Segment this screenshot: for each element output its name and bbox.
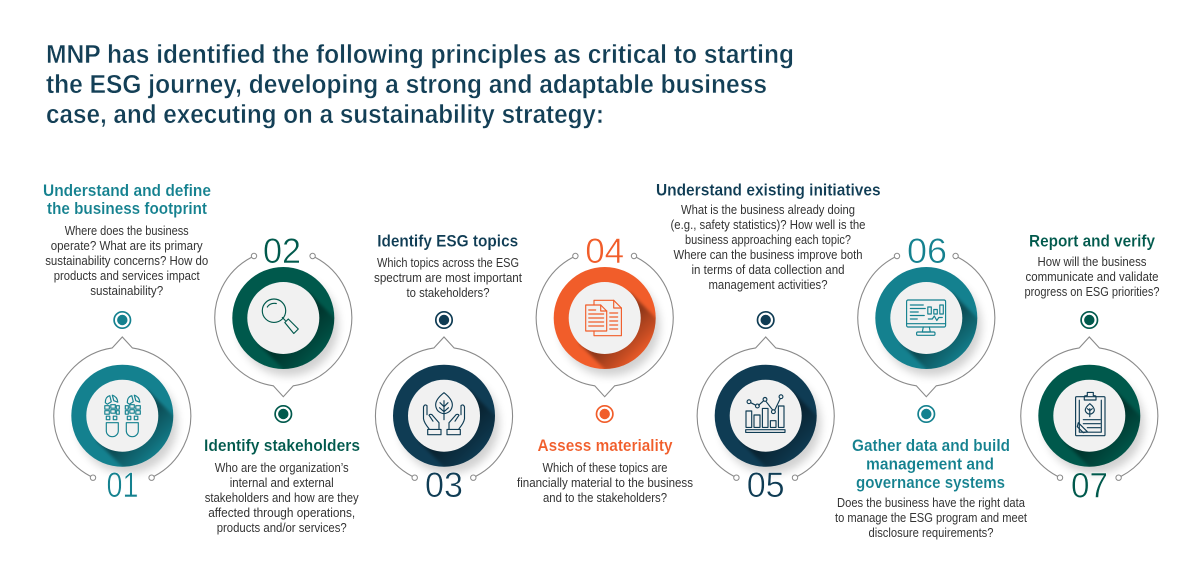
heading 04: Assess materiality	[538, 437, 673, 455]
body text 02: Who are the organization’s	[215, 461, 349, 475]
badge 02	[214, 252, 352, 398]
marker dot 02	[275, 406, 292, 422]
body text 05: management activities?	[708, 278, 828, 292]
title	[46, 41, 794, 129]
badge 04	[536, 252, 674, 398]
body text 03	[374, 256, 522, 300]
title: the ESG journey, developing a strong and adaptable business	[46, 71, 767, 99]
body text 03: spectrum are most important	[374, 271, 522, 285]
body text 01: operate? What are its primary	[51, 239, 203, 253]
heading 06: management and	[866, 456, 994, 474]
body text 05: in terms of data collection and	[692, 263, 844, 277]
badge 01	[53, 336, 192, 481]
step 02: identify stakeholders	[204, 231, 369, 535]
title: case, and executing on a sustainability strategy:	[46, 101, 604, 129]
number 06: 06	[907, 231, 947, 271]
marker dot 05	[758, 312, 774, 328]
badge 05	[696, 336, 835, 481]
icon: bar and line chart	[746, 395, 785, 432]
badge 03	[374, 336, 514, 481]
number 04: 04	[585, 231, 624, 271]
heading 02: Identify stakeholders	[204, 437, 360, 455]
marker dot 04	[596, 406, 613, 422]
step 05: understand existing initiatives	[656, 182, 881, 505]
body text 05: (e.g., safety statistics)? How well is the	[670, 218, 866, 232]
number 03: 03	[425, 465, 463, 505]
number 07: 07	[1071, 466, 1108, 506]
body text 04: and to the stakeholders?	[543, 491, 667, 505]
body text 07	[1024, 255, 1160, 299]
badge 07	[1020, 336, 1158, 481]
body text 06: Does the business have the right data	[837, 496, 1025, 510]
body text 06: to manage the ESG program and meet	[835, 511, 1027, 525]
step 06: gather data and build management and governance systems	[835, 231, 1027, 540]
step 04: assess materiality	[517, 231, 693, 505]
body text 01	[45, 224, 208, 298]
body text 03: to stakeholders?	[406, 286, 490, 300]
icon: footprints	[105, 395, 140, 437]
body text 07: How will the business	[1038, 255, 1146, 269]
infographic	[44, 44, 1160, 540]
badge 06	[857, 252, 996, 398]
body text 01: products and services impact	[54, 269, 200, 283]
body text 05: business approaching each topic?	[685, 233, 851, 247]
marker dot 07	[1081, 312, 1098, 328]
body text 02: products and/or services?	[217, 521, 347, 535]
marker dot 03	[436, 312, 452, 328]
step 01: understand and define the business footprint	[43, 182, 211, 505]
body text 02	[205, 461, 359, 535]
body text 01: sustainability concerns? How do	[45, 254, 208, 268]
marker dot 06	[918, 406, 934, 422]
heading 03: Identify ESG topics	[377, 233, 518, 251]
heading 07: Report and verify	[1029, 233, 1156, 251]
body text 02: affected through operations,	[208, 506, 355, 520]
body text 04: financially material to the business	[517, 476, 693, 490]
icon: hands holding leaf	[424, 393, 464, 435]
step 07: report and verify	[1020, 234, 1160, 498]
body text 07: progress on ESG priorities?	[1024, 285, 1160, 299]
body text 03: Which topics across the ESG	[377, 256, 519, 270]
step 03: identify ESG topics	[374, 233, 530, 505]
body text 05	[670, 203, 866, 292]
number 05: 05	[747, 465, 785, 505]
heading 05: Understand existing initiatives	[656, 182, 881, 200]
icon: clipboard with leaf	[1076, 392, 1105, 436]
body text 06	[835, 496, 1027, 540]
heading 06	[852, 437, 1010, 492]
heading 06: governance systems	[856, 474, 1005, 492]
body text 07: communicate and validate	[1026, 270, 1158, 284]
marker dot 01	[114, 312, 130, 328]
body text 01: Where does the business	[65, 224, 189, 238]
heading 01: the business footprint	[47, 200, 207, 218]
body text 04	[517, 461, 693, 505]
heading 01: Understand and define	[43, 182, 211, 200]
number 02: 02	[263, 231, 301, 271]
body text 02: internal and external	[230, 476, 334, 490]
body text 01: sustainability?	[90, 284, 163, 298]
body text 04: Which of these topics are	[542, 461, 668, 475]
body text 06: disclosure requirements?	[868, 526, 994, 540]
body text 02: stakeholders and how are they	[205, 491, 359, 505]
body text 05: Where can the business improve both	[674, 248, 862, 262]
title: MNP has identified the following principles as critical to starting	[46, 41, 794, 69]
icon: monitor dashboard	[907, 300, 946, 335]
icon: documents	[586, 300, 621, 336]
heading 01	[43, 182, 211, 218]
number 01: 01	[106, 465, 138, 505]
icon: magnifying glass	[262, 299, 298, 334]
body text 05: What is the business already doing	[681, 203, 855, 217]
heading 06: Gather data and build	[852, 437, 1010, 455]
